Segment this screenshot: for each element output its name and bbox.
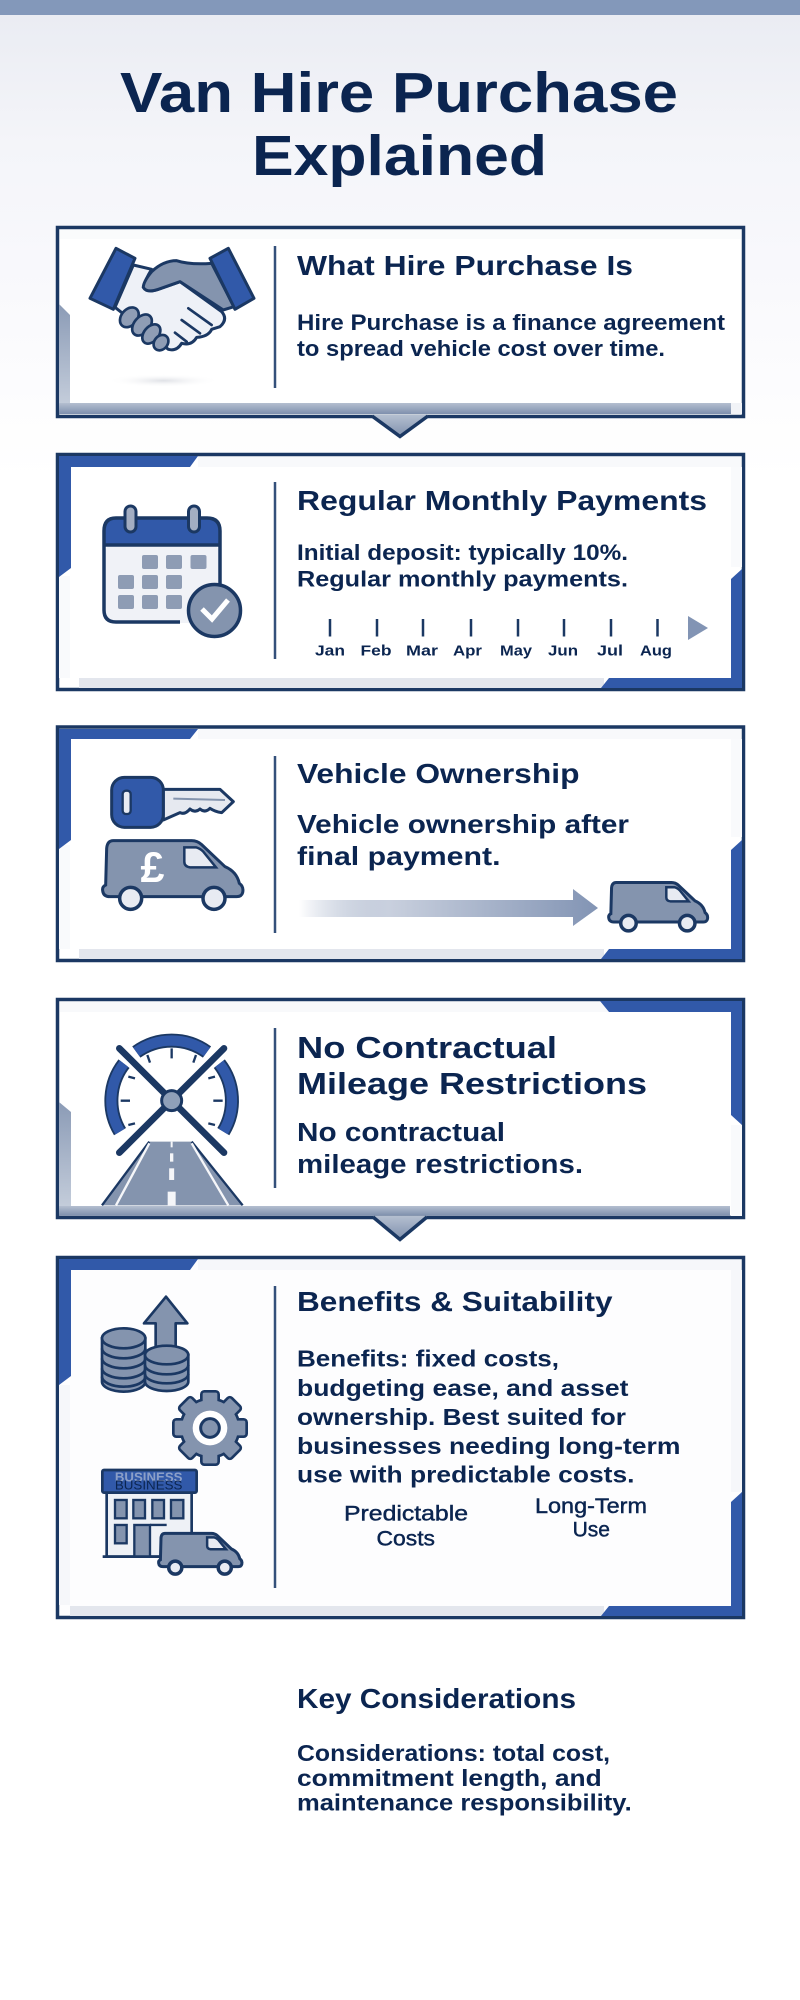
panel: vehicle ownership: [58, 727, 744, 960]
panel: benefits and suitability: [58, 1258, 744, 1618]
body text: [297, 1740, 632, 1816]
body text: use with predictable costs.: [297, 1462, 634, 1488]
body text: final payment.: [297, 841, 500, 871]
panel notch: [373, 1216, 427, 1240]
body text: [297, 540, 628, 592]
body text: No contractual: [297, 1119, 505, 1147]
body text: Considerations: total cost,: [297, 1740, 610, 1766]
icon: speedometer crossed out over road: [102, 1041, 243, 1205]
body text: Benefits: fixed costs,: [297, 1346, 559, 1372]
icon: small van: [609, 883, 708, 931]
top bar: [0, 0, 800, 15]
body text: maintenance responsibility.: [297, 1790, 632, 1816]
body text: [297, 809, 629, 871]
month timeline: Mar: [406, 642, 438, 660]
title: Explained: [252, 124, 547, 188]
icon: van with pound: £: [141, 844, 165, 892]
body text: mileage restrictions.: [297, 1151, 583, 1179]
icon: van with pound: [103, 841, 243, 909]
body text: businesses needing long-term: [297, 1433, 680, 1459]
heading: [297, 1030, 647, 1101]
body text: Initial deposit: typically 10%.: [297, 540, 628, 565]
month timeline: Jan: [315, 642, 345, 660]
section: key considerations: [297, 1683, 632, 1816]
body text: [297, 1346, 680, 1488]
panel: no contractual mileage restrictions: [58, 1000, 744, 1240]
heading: No Contractual: [297, 1030, 557, 1065]
heading: Vehicle Ownership: [297, 758, 580, 789]
icon: calendar: [104, 506, 240, 636]
icon: business building with van: BUSINESS: [115, 1471, 182, 1485]
heading: Regular Monthly Payments: [297, 485, 707, 516]
month timeline: Feb: [360, 642, 392, 660]
month timeline: Jul: [597, 642, 623, 660]
label: long-term use: Use: [573, 1519, 610, 1542]
month timeline: [315, 616, 708, 660]
title: Van Hire Purchase: [120, 61, 678, 125]
body text: to spread vehicle cost over time.: [297, 336, 665, 361]
heading: What Hire Purchase Is: [297, 250, 633, 281]
month timeline: May: [500, 642, 533, 660]
label: predictable costs: Costs: [376, 1528, 435, 1551]
panel: regular monthly payments: [58, 454, 744, 690]
heading: Benefits & Suitability: [297, 1286, 613, 1317]
arrow to van: [299, 889, 598, 926]
label: predictable costs: Predictable: [344, 1503, 468, 1526]
title: [120, 61, 678, 188]
icon: business building with van: [102, 1470, 242, 1574]
body text: budgeting ease, and asset: [297, 1375, 629, 1401]
panel: what hire purchase is: [58, 228, 744, 437]
icon: coins with up arrow: [102, 1297, 188, 1392]
month timeline: Aug: [640, 642, 672, 660]
body text: commitment length, and: [297, 1765, 602, 1791]
month timeline: Jun: [548, 642, 578, 660]
heading: Key Considerations: [297, 1683, 576, 1714]
icon: business building with van: BUSINESS: [115, 1478, 182, 1492]
label: long-term use: Long-Term: [535, 1495, 647, 1518]
heading: Mileage Restrictions: [297, 1066, 647, 1101]
icon: handshake: [90, 248, 254, 387]
body text: ownership. Best suited for: [297, 1404, 626, 1430]
panel notch: [372, 415, 428, 437]
label: predictable costs: [344, 1503, 468, 1551]
body text: Hire Purchase is a finance agreement: [297, 310, 726, 335]
body text: [297, 1119, 583, 1179]
month timeline: Apr: [453, 642, 482, 660]
label: long-term use: [535, 1495, 647, 1542]
body text: Regular monthly payments.: [297, 566, 628, 592]
icon: key: [112, 777, 233, 827]
body text: [297, 310, 726, 361]
icon: gear: [175, 1393, 245, 1463]
body text: Vehicle ownership after: [297, 809, 629, 839]
